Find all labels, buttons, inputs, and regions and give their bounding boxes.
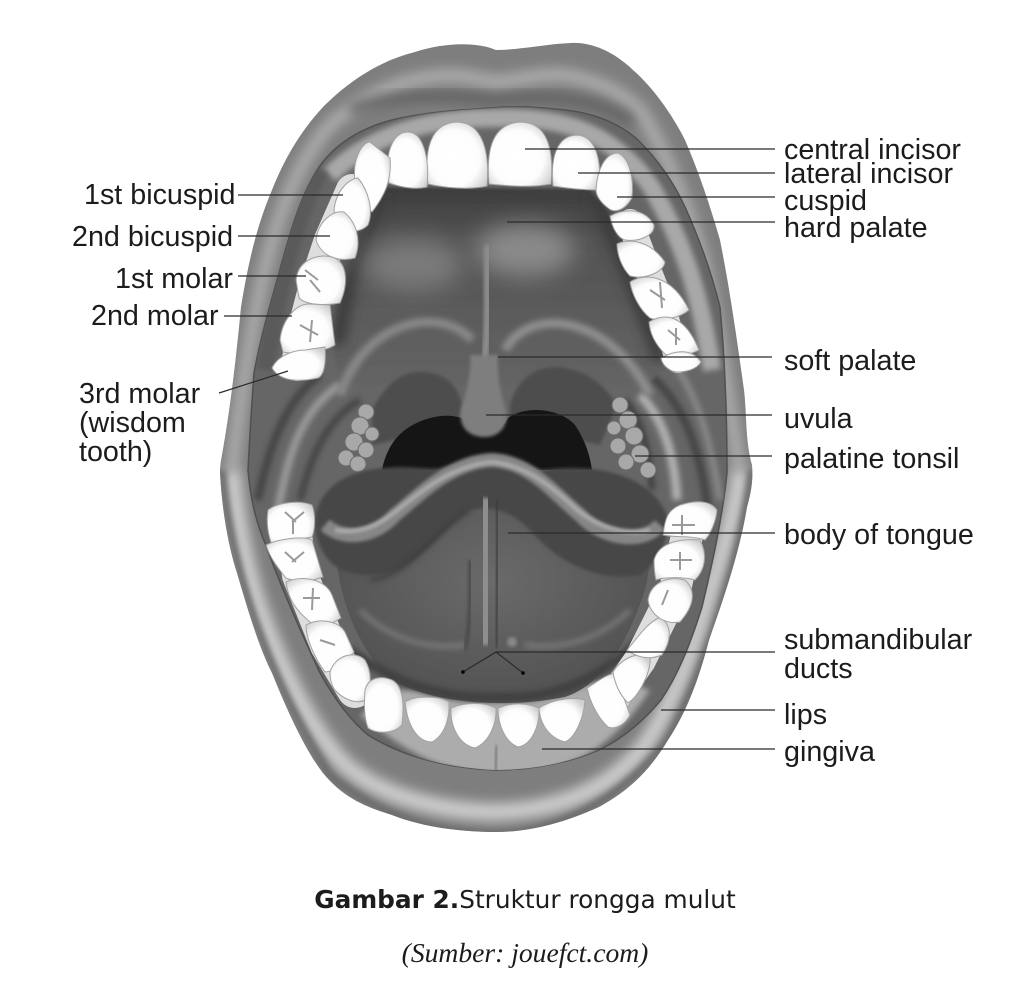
label: 2nd bicuspid: 2nd bicuspid — [72, 221, 233, 253]
label: palatine tonsil: palatine tonsil — [784, 443, 959, 475]
label: 3rd molar (wisdom tooth): tooth) — [79, 436, 152, 468]
illustration: open mouth — [220, 43, 752, 834]
oral cavity — [248, 107, 727, 770]
label: body of tongue: body of tongue — [784, 519, 974, 551]
caption: Gambar 2.Struktur rongga mulut — [314, 885, 736, 914]
upper gum — [330, 118, 712, 370]
tooth row backing — [292, 190, 690, 700]
label: submandibular ducts: ducts — [784, 653, 853, 685]
upper teeth — [272, 122, 701, 380]
label: 1st bicuspid: 1st bicuspid — [84, 179, 236, 211]
label: 1st molar: 1st molar — [115, 263, 233, 295]
cheek folds — [253, 372, 724, 506]
label: submandibular ducts: submandibular — [784, 624, 973, 656]
label: central incisor: central incisor — [784, 134, 961, 166]
label: lips: lips — [784, 699, 827, 731]
label: uvula: uvula — [784, 403, 853, 435]
label: 3rd molar (wisdom tooth): 3rd molar — [79, 378, 201, 410]
throat — [372, 367, 617, 470]
body of tongue — [315, 460, 668, 703]
hard and soft palate — [333, 187, 665, 395]
label: 2nd molar: 2nd molar — [91, 300, 219, 332]
palatine tonsils — [338, 397, 656, 478]
label: hard palate: hard palate — [784, 212, 928, 244]
label: cuspid: cuspid — [784, 185, 867, 217]
label: 3rd molar (wisdom tooth) — [79, 371, 288, 468]
label: lateral incisor: lateral incisor — [784, 158, 953, 190]
uvula — [461, 355, 506, 437]
lower teeth — [266, 502, 717, 748]
label: gingiva: gingiva — [784, 736, 875, 768]
gingiva — [360, 680, 650, 775]
lips — [220, 43, 752, 834]
label: submandibular ducts — [461, 624, 973, 685]
label: soft palate: soft palate — [784, 345, 916, 377]
source: (Sumber: jouefct.com) — [402, 937, 648, 968]
label: 3rd molar (wisdom tooth): (wisdom — [79, 407, 186, 439]
